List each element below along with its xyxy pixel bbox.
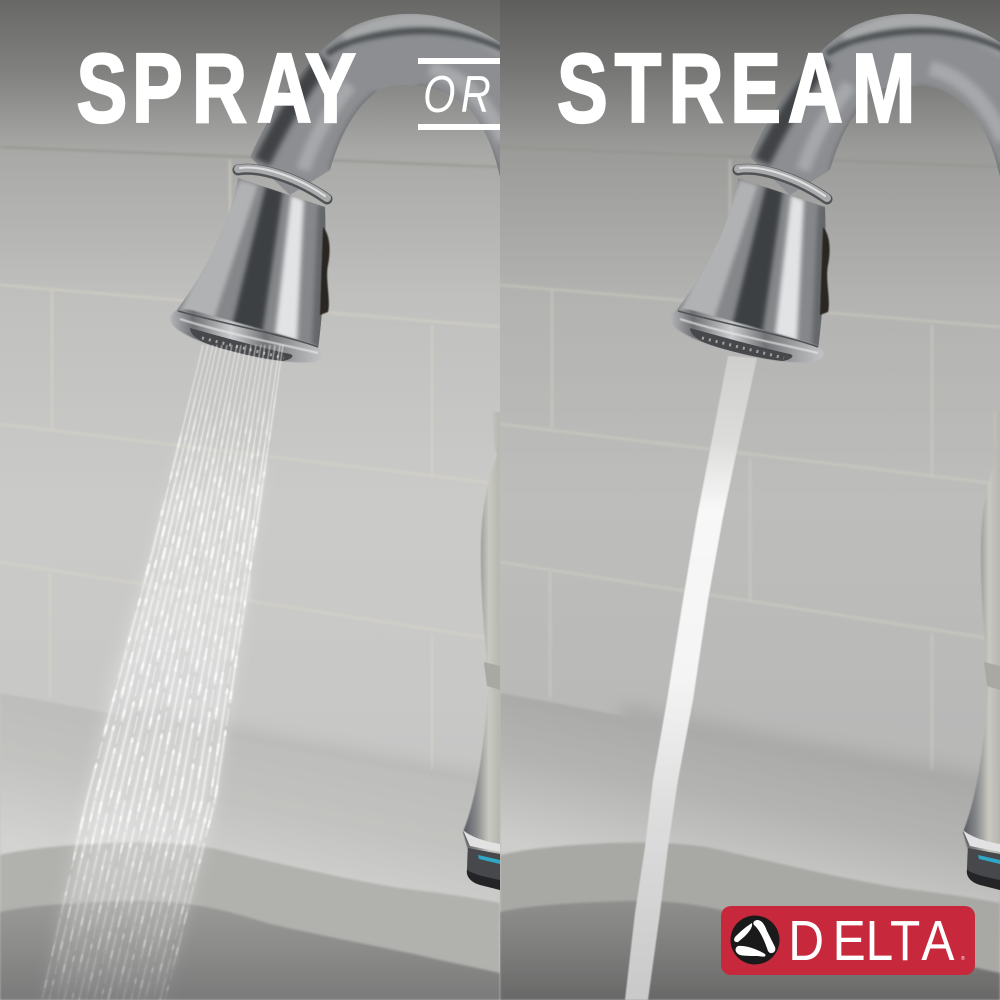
panel: spray — [0, 0, 505, 1000]
title: spray: SPRAY — [76, 33, 356, 143]
spray sparkle — [44, 421, 271, 1000]
icon: delta mark — [730, 916, 780, 964]
wall shadow left — [214, 730, 477, 783]
wall shadow right — [620, 715, 1000, 790]
panel: stream — [500, 0, 1000, 1000]
faucet base right — [962, 476, 1000, 890]
stream water — [625, 356, 757, 1000]
faucet head left — [170, 0, 505, 362]
spray water — [42, 345, 283, 1000]
counter front right — [500, 842, 1000, 974]
wall tiles right — [500, 147, 1000, 770]
wall tiles left — [0, 146, 498, 476]
title: stream: STREAM — [557, 33, 915, 143]
logo: delta: ® — [961, 955, 965, 962]
spray fine streaks — [43, 458, 266, 998]
wall background right — [500, 0, 1000, 1000]
sink basin right — [500, 901, 1000, 1000]
connector: or: OR — [423, 65, 491, 123]
spray soft streaks — [55, 462, 264, 956]
spray mist — [54, 514, 248, 988]
logo: delta: DELTA — [788, 910, 955, 973]
counter right — [500, 694, 1000, 902]
spray thin strands — [167, 344, 284, 497]
sink basin left — [0, 901, 500, 1000]
logo: delta — [721, 906, 975, 975]
counter front left — [0, 842, 500, 974]
connector: or — [418, 58, 500, 130]
faucet base left — [463, 412, 500, 890]
wall background left — [0, 0, 500, 1000]
counter left — [0, 694, 499, 902]
faucet head right — [670, 0, 1000, 362]
